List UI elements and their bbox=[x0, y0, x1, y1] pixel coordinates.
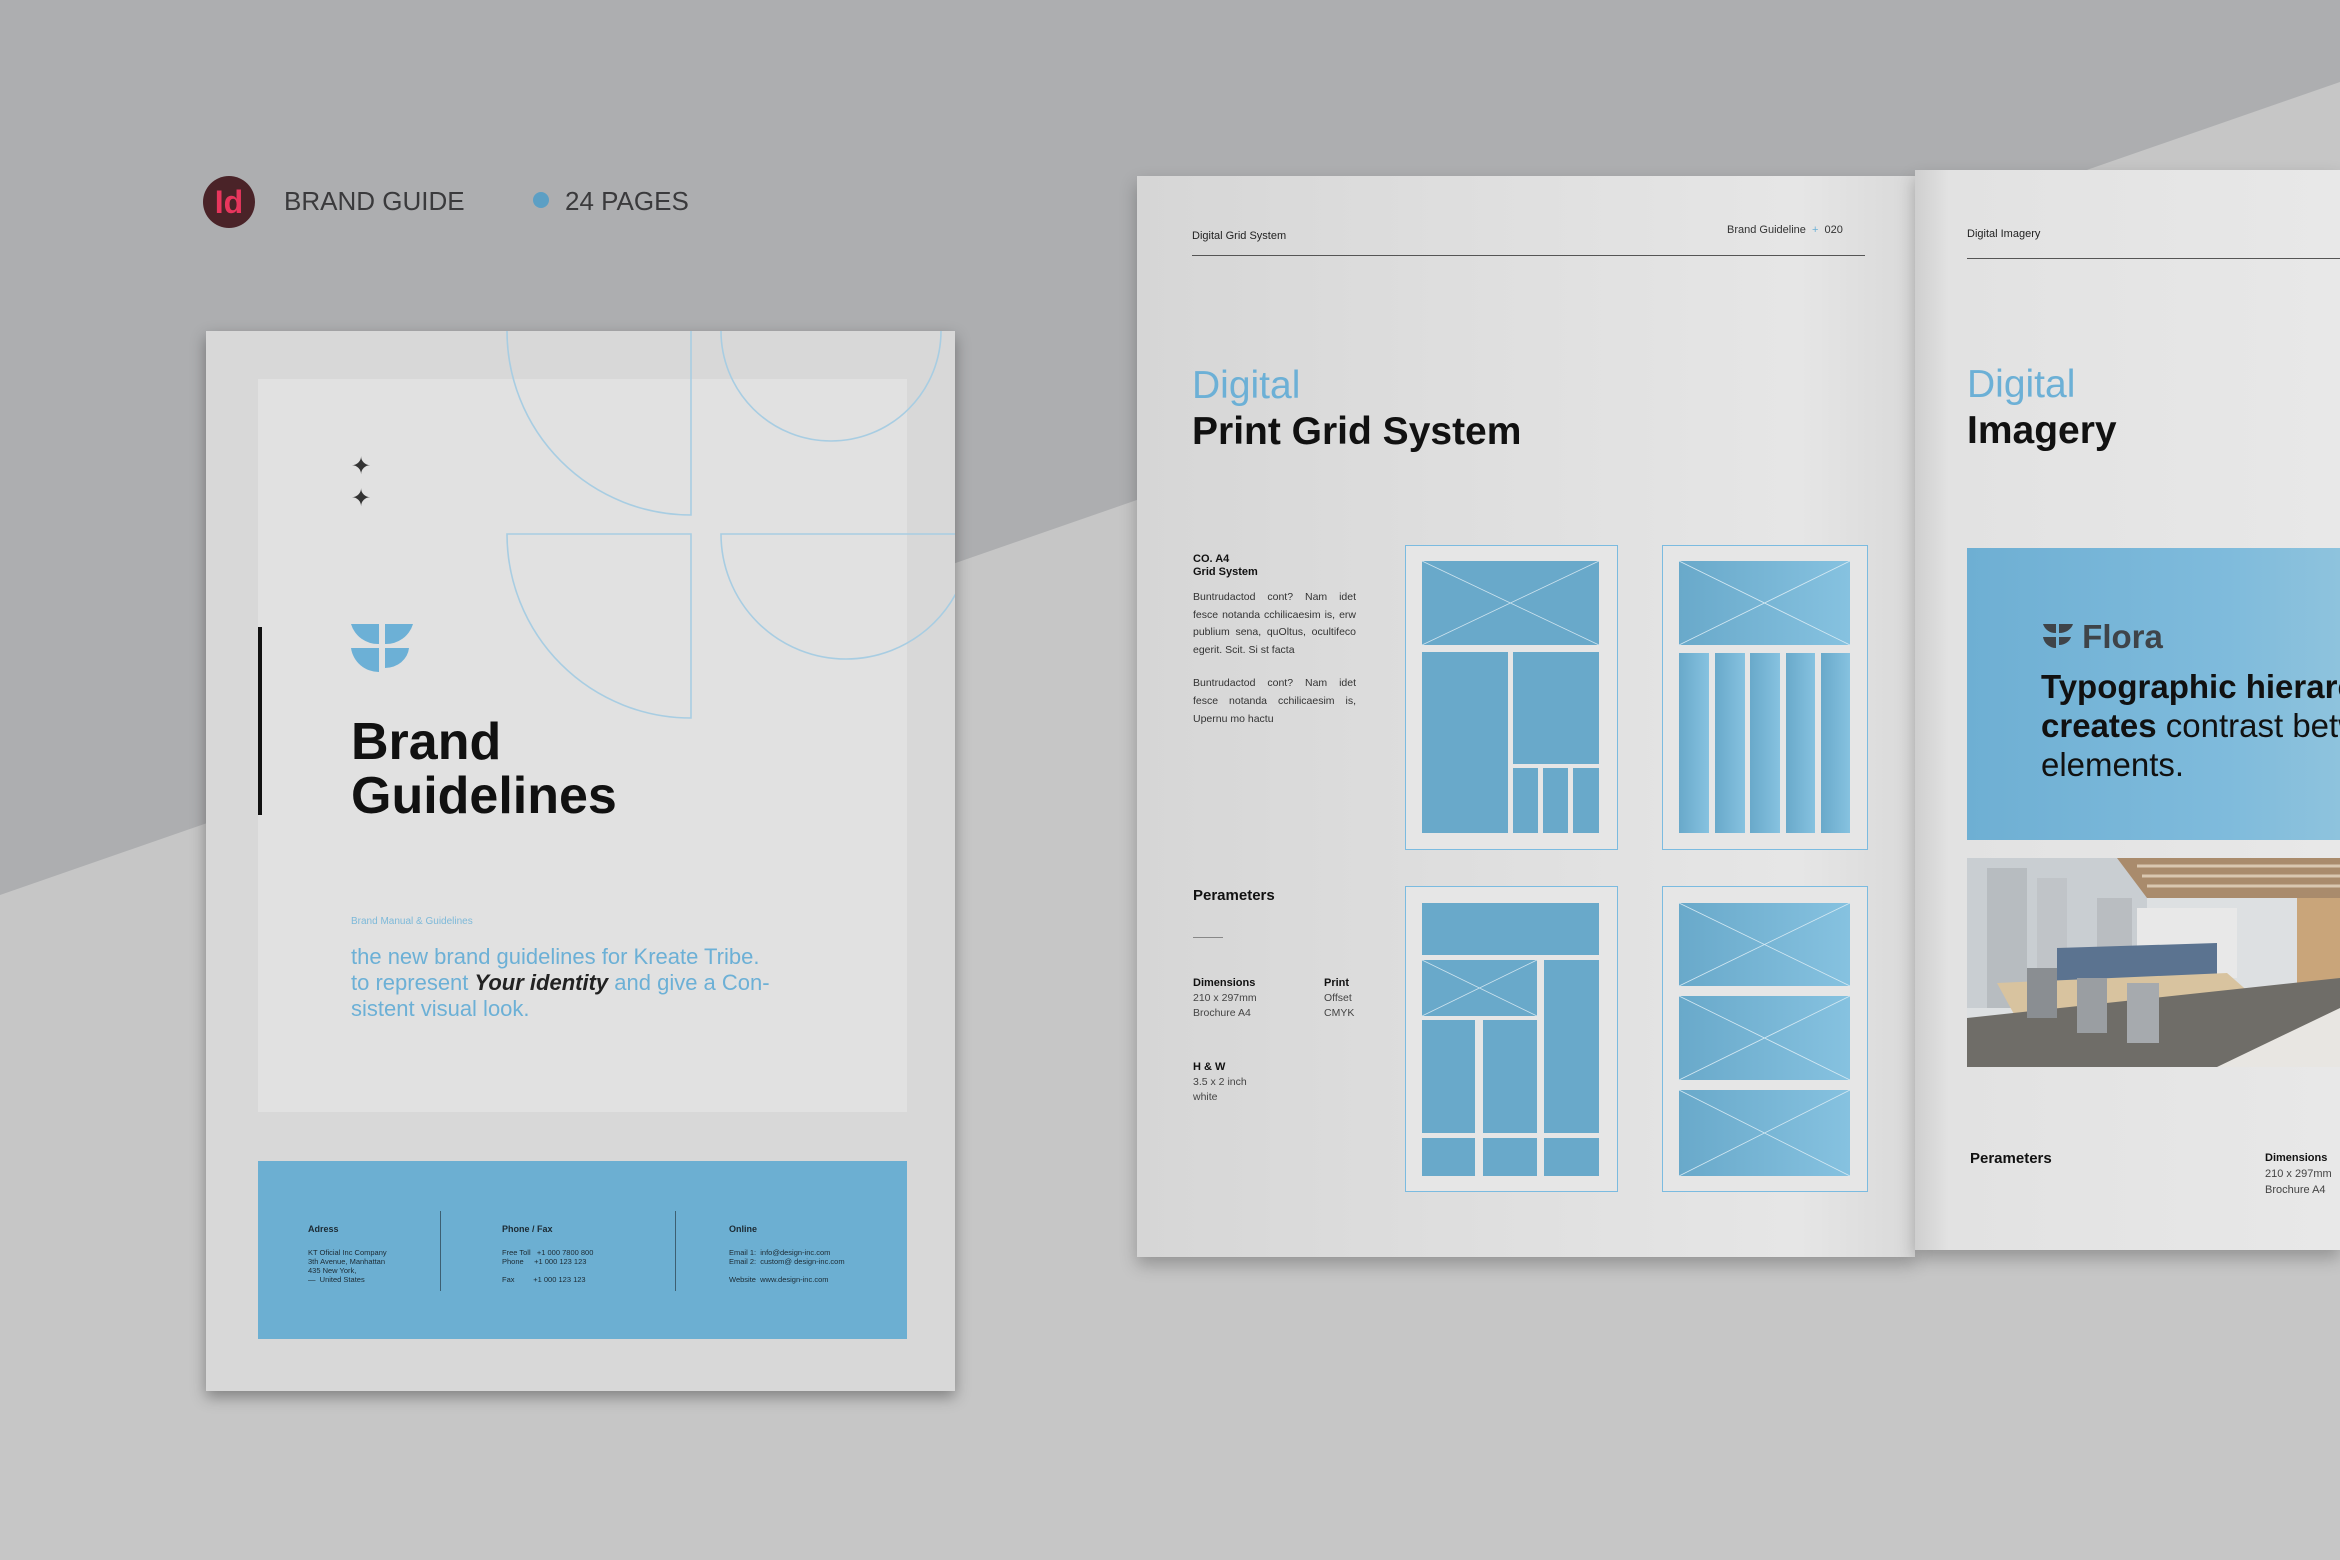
column: online: Website www.design-inc.com bbox=[729, 1275, 828, 1284]
parameters block bbox=[1193, 887, 1354, 1103]
column: address bbox=[308, 1224, 387, 1284]
text block: grid system: Grid System bbox=[1193, 566, 1258, 578]
column: phone: Fax +1 000 123 123 bbox=[502, 1275, 586, 1284]
running header: Digital Imagery bbox=[1967, 228, 2040, 240]
quote text: elements. bbox=[2041, 746, 2184, 783]
icon: dot bbox=[533, 192, 549, 208]
label: brand guide: BRAND GUIDE bbox=[284, 186, 465, 216]
parameters block: CMYK bbox=[1324, 1007, 1354, 1019]
heading bbox=[1192, 364, 1521, 453]
column: phone: Phone / Fax bbox=[502, 1224, 553, 1234]
icon: sparkles: ✦ bbox=[351, 485, 371, 512]
tagline: the new brand guidelines for Kreate Tribe. bbox=[351, 944, 759, 969]
parameters block: white bbox=[1193, 1091, 1218, 1103]
inner light panel bbox=[258, 379, 907, 1112]
tagline: to represent Your identity and give a Con- bbox=[351, 970, 770, 995]
icon: InDesign: Id bbox=[215, 184, 243, 220]
text block: grid system: Buntrudactod cont? Nam idet fesce notanda cchilicaesim is, Upernu mo hactu bbox=[1193, 677, 1356, 725]
accent bar bbox=[258, 627, 262, 815]
panel: brochure cover bbox=[206, 331, 955, 1391]
panel: open book right page bbox=[1915, 170, 2340, 1250]
running header: Digital Grid System bbox=[1192, 230, 1286, 242]
heading bbox=[1967, 363, 2117, 452]
diagram 2 bbox=[1679, 561, 1850, 833]
title: Guidelines bbox=[351, 767, 617, 825]
parameters block: Offset bbox=[1324, 992, 1352, 1004]
parameters block: H & W bbox=[1193, 1061, 1225, 1073]
header: software badge and page count bbox=[203, 176, 689, 228]
logo mark bbox=[351, 624, 413, 672]
parameters block: Perameters bbox=[1193, 887, 1275, 904]
panel: open book left page bbox=[1137, 176, 1915, 1257]
heading: Digital bbox=[1967, 363, 2075, 406]
icon: InDesign bbox=[203, 176, 255, 228]
parameters block: Dimensions bbox=[1193, 977, 1255, 989]
footer: contact panel bbox=[258, 1161, 907, 1339]
column: phone: Phone +1 000 123 123 bbox=[502, 1257, 586, 1266]
heading: Imagery bbox=[1967, 409, 2117, 452]
column: online bbox=[729, 1224, 845, 1284]
parameters block: Print bbox=[1324, 977, 1349, 989]
column: address: — United States bbox=[308, 1275, 365, 1284]
logo: Flora: Flora bbox=[2082, 618, 2163, 655]
small caption: Brand Manual & Guidelines bbox=[351, 916, 473, 927]
text block: grid system: Buntrudactod cont? Nam idet fesce notanda cchilicaesim is, erw publium sena, quOltus, ocultifeco egerit. Scit. Si st facta bbox=[1193, 591, 1356, 656]
parameters block: Brochure A4 bbox=[1193, 1007, 1251, 1019]
column: online: Online bbox=[729, 1224, 757, 1234]
column: address: KT Oficial Inc Company bbox=[308, 1248, 387, 1257]
diagram 3 bbox=[1422, 903, 1599, 1176]
logo: Flora bbox=[2043, 618, 2164, 655]
chart: grid layout diagrams bbox=[1405, 545, 1868, 1192]
parameters block: 3.5 x 2 inch bbox=[1193, 1076, 1247, 1088]
parameters block: 210 x 297mm bbox=[1193, 992, 1257, 1004]
diagram 1 bbox=[1422, 561, 1599, 833]
column: online: Email 1: info@design-inc.com bbox=[729, 1248, 830, 1257]
diagram 4 bbox=[1679, 903, 1850, 1176]
column: phone: Free Toll +1 000 7800 800 bbox=[502, 1248, 593, 1257]
panel: open book right page: Dimensions bbox=[2265, 1152, 2327, 1164]
text block: grid system bbox=[1193, 553, 1356, 725]
heading: Digital bbox=[1192, 364, 1300, 407]
tagline bbox=[351, 944, 770, 1021]
column: address: 3th Avenue, Manhattan bbox=[308, 1257, 385, 1266]
icon: sparkles bbox=[351, 453, 371, 512]
decorative arcs bbox=[506, 331, 955, 719]
panel: open book left page: Brand Guideline + 020 bbox=[1727, 224, 1843, 236]
panel: open book right page: Brochure A4 bbox=[2265, 1184, 2326, 1196]
label: pages: 24 PAGES bbox=[565, 186, 689, 216]
heading: Print Grid System bbox=[1192, 410, 1521, 453]
tagline: sistent visual look. bbox=[351, 996, 530, 1021]
column: online: Email 2: custom@ design-inc.com bbox=[729, 1257, 845, 1266]
column: address: Adress bbox=[308, 1224, 339, 1234]
parameters block: Perameters bbox=[1970, 1150, 2052, 1167]
panel: open book right page: 210 x 297mm bbox=[2265, 1168, 2332, 1180]
quote text bbox=[2041, 668, 2340, 783]
title bbox=[351, 713, 617, 825]
image panel: blue quote bbox=[1967, 548, 2340, 840]
column: phone bbox=[502, 1224, 594, 1284]
title: Brand bbox=[351, 713, 501, 771]
photo: office interior bbox=[1967, 858, 2340, 1067]
text block: grid system: CO. A4 bbox=[1193, 553, 1229, 565]
column: address: 435 New York, bbox=[308, 1266, 356, 1275]
icon: sparkles: ✦ bbox=[351, 453, 371, 480]
